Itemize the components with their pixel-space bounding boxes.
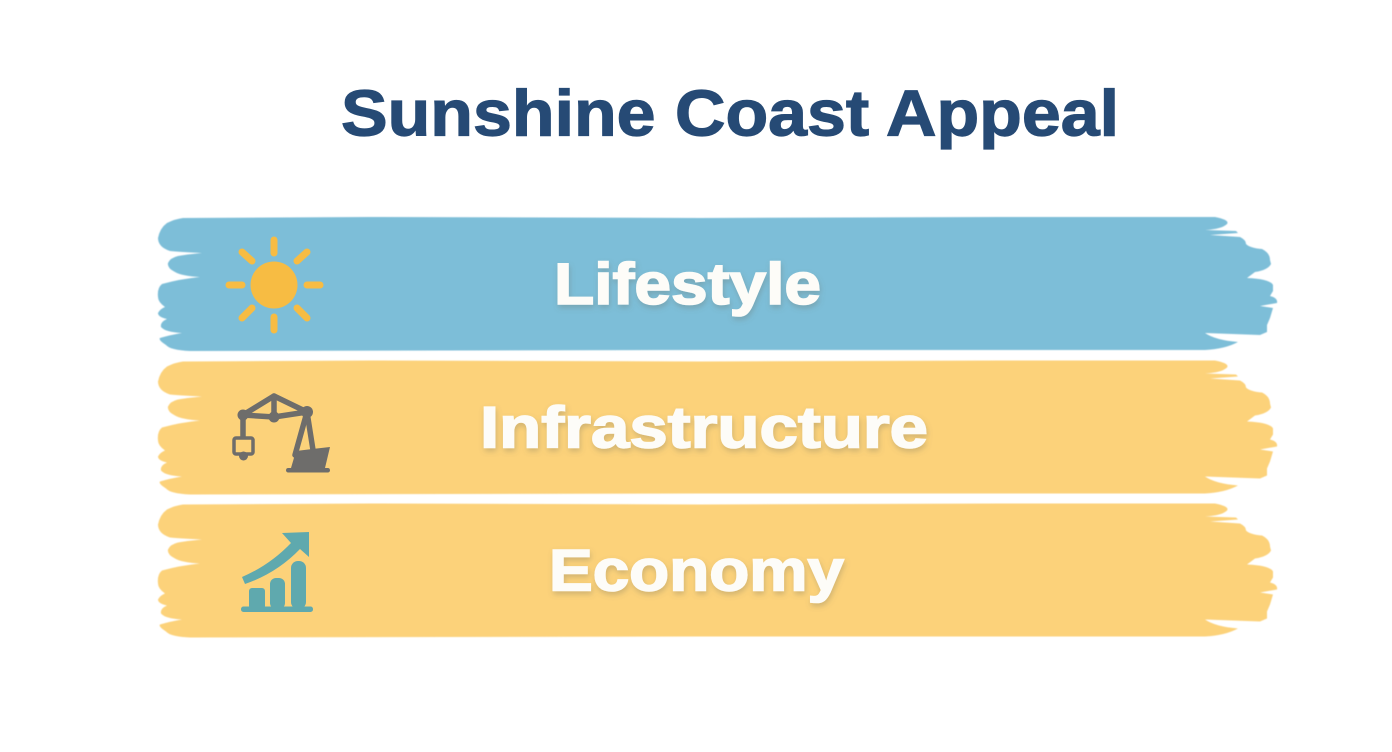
icon: growth chart — [241, 532, 313, 612]
icon: sun — [229, 240, 320, 330]
icon: crane — [234, 396, 330, 472]
brush band: infrastructure — [158, 360, 1277, 494]
brush band: economy — [158, 504, 1277, 638]
panel: economy — [158, 504, 1277, 638]
label: infrastructure: Infrastructure — [480, 396, 928, 460]
label: lifestyle: Lifestyle — [554, 252, 821, 317]
title: Sunshine Coast Appeal — [341, 76, 1119, 150]
panel: infrastructure — [158, 360, 1277, 494]
label: economy: Economy — [549, 538, 844, 604]
brush band: lifestyle — [158, 217, 1277, 351]
panel: lifestyle — [158, 217, 1277, 351]
